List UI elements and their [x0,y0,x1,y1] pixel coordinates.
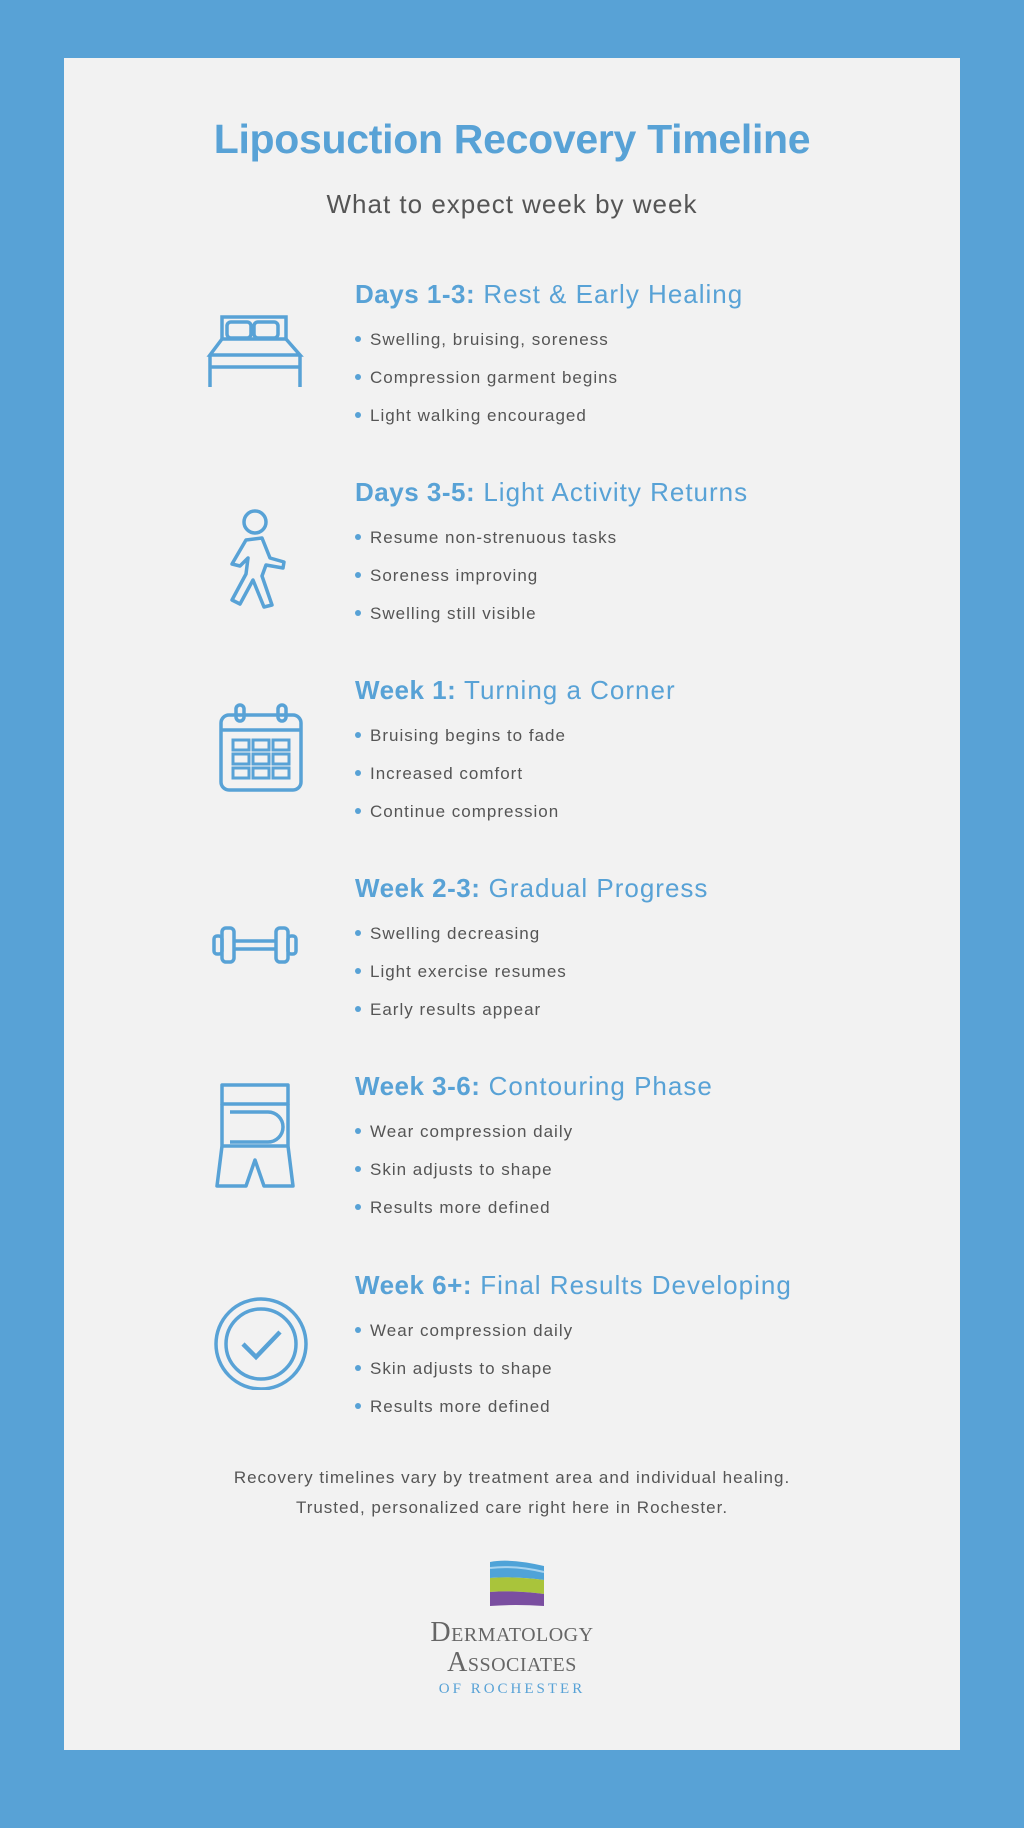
bullets: Increased comfort [370,764,523,783]
heading: Days 1-3: Rest & Early Healing [355,279,743,309]
footer text: Trusted, personalized care right here in Rochester. [296,1498,728,1517]
icon: check circle [214,1297,308,1390]
icon: bed [206,315,304,387]
title: Liposuction Recovery Timeline [214,116,810,162]
bullets: Light walking encouraged [370,406,587,425]
bullets: Continue compression [370,802,559,821]
bullets: Light exercise resumes [370,962,567,981]
bullets: Skin adjusts to shape [370,1160,553,1179]
bullets [355,924,567,1019]
footer text: Recovery timelines vary by treatment area and individual healing. [234,1468,790,1487]
section: week 6+ [214,1270,792,1416]
footer text [234,1468,790,1517]
bullets: Resume non-strenuous tasks [370,528,617,547]
logo mark [490,1560,544,1606]
icon: dumbbell [212,926,298,964]
bullets [355,1122,573,1217]
subtitle: What to expect week by week [327,189,697,219]
bullets: Swelling, bruising, soreness [370,330,609,349]
logo text: Dermatology [430,1617,594,1648]
section: days 1-3 [206,279,743,425]
heading: Week 1: Turning a Corner [355,675,676,705]
bullets [355,1321,573,1416]
section: days 3-5 [230,477,748,623]
icon: walking person [230,509,286,609]
heading: Week 6+: Final Results Developing [355,1270,792,1300]
bullets [355,330,618,425]
bullets: Results more defined [370,1198,551,1217]
logo: OF ROCHESTER [439,1681,585,1697]
logo text [430,1617,594,1678]
bullets: Swelling decreasing [370,924,540,943]
bullets: Wear compression daily [370,1321,573,1340]
section: week 1 [219,675,676,821]
section: week 2-3 [212,873,708,1019]
icon: calendar [219,703,303,792]
bullets: Bruising begins to fade [370,726,566,745]
bullets: Soreness improving [370,566,538,585]
bullets: Results more defined [370,1397,551,1416]
bullets [355,726,566,821]
logo [430,1560,594,1697]
bullets: Early results appear [370,1000,541,1019]
bullets: Skin adjusts to shape [370,1359,553,1378]
heading: Days 3-5: Light Activity Returns [355,477,748,507]
logo text: Associates [447,1647,577,1678]
section: week 3-6 [215,1071,713,1217]
bullets: Swelling still visible [370,604,537,623]
bullets: Wear compression daily [370,1122,573,1141]
heading: Week 3-6: Contouring Phase [355,1071,713,1101]
bullets: Compression garment begins [370,368,618,387]
bullets [355,528,617,623]
icon: compression garment [215,1083,295,1188]
heading: Week 2-3: Gradual Progress [355,873,708,903]
